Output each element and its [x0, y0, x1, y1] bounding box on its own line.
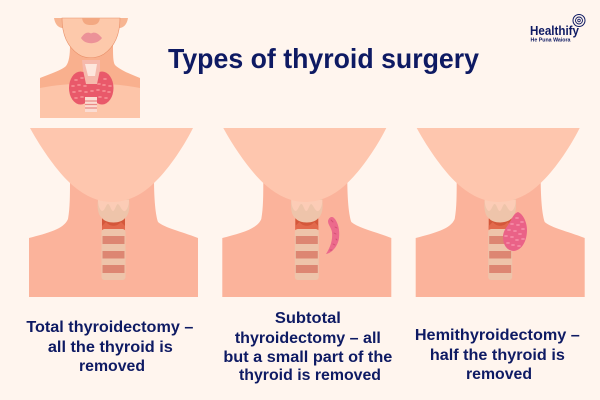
logo: Healthify [530, 14, 585, 44]
illustration: neck, half thyroid left [416, 128, 585, 297]
thyroid lobes [69, 72, 114, 104]
nose [82, 18, 100, 25]
lips [81, 33, 102, 43]
logo tagline: He Puna Waiora [530, 38, 571, 44]
panel: hemithyroidectomy [415, 128, 585, 383]
thyroid half lobe [503, 212, 527, 251]
logo wordmark: Healthify [530, 24, 579, 38]
panel: total thyroidectomy [26, 128, 198, 375]
caption: total thyroidectomy: removed [79, 358, 145, 375]
larynx [82, 60, 100, 84]
caption: hemithyroidectomy: half the thyroid is [430, 347, 565, 364]
ears [54, 18, 128, 28]
caption: hemithyroidectomy: removed [466, 366, 532, 383]
thyroid remnant [326, 217, 339, 254]
illustration: neck with thyroid gland [40, 18, 140, 118]
shoulders and neck [40, 45, 140, 118]
thyroid texture [72, 78, 111, 98]
trachea [85, 97, 97, 112]
caption: subtotal thyroidectomy: thyroidectomy – all [235, 330, 381, 347]
title: Types of thyroid surgery [168, 43, 479, 74]
illustration: neck, small part of thyroid left [222, 128, 391, 297]
panel: subtotal thyroidectomy [222, 128, 397, 384]
caption: subtotal thyroidectomy: but a small part of the [223, 349, 393, 366]
caption: total thyroidectomy: Total thyroidectomy – [26, 319, 194, 336]
caption: subtotal thyroidectomy: thyroid is removed [239, 367, 381, 384]
logo mark [573, 14, 585, 26]
caption: hemithyroidectomy: Hemithyroidectomy – [415, 327, 580, 344]
caption: total thyroidectomy: all the thyroid is [48, 339, 173, 356]
caption: subtotal thyroidectomy: Subtotal [275, 310, 341, 327]
face [62, 18, 120, 58]
illustration: neck, thyroid removed [29, 128, 198, 297]
